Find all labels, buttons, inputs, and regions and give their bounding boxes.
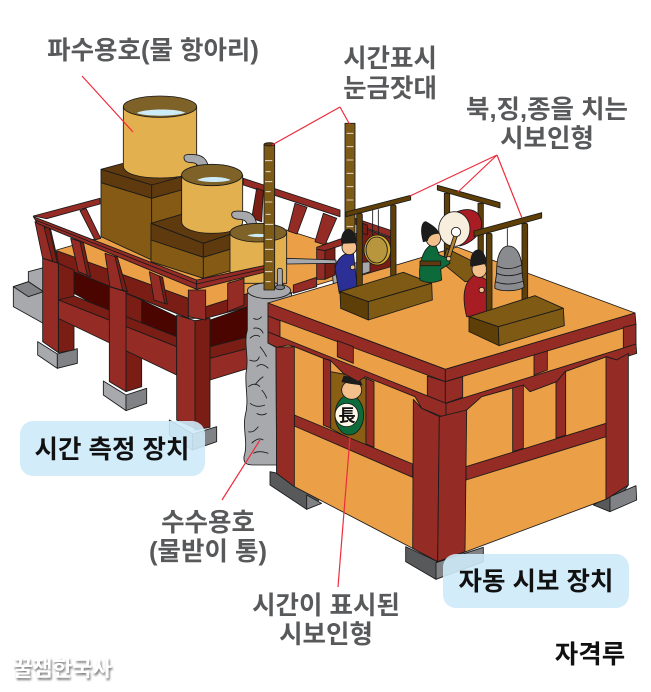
left wall <box>268 303 445 562</box>
leader lines <box>82 76 522 587</box>
box stand: medium <box>151 214 233 278</box>
caption: signal figures: 시보인형 <box>500 125 594 153</box>
building footings <box>270 472 637 579</box>
drum figure: green <box>420 222 451 282</box>
panel: time measuring device (water platform) <box>13 96 340 465</box>
drum stand back <box>437 185 500 282</box>
water jar: medium <box>182 164 243 233</box>
caption: signal figures: 북,징,종을 치는 <box>466 96 628 124</box>
pipe: large to medium jar <box>184 154 209 178</box>
lower eave beams with brackets <box>268 332 637 418</box>
rear time scale rod <box>345 123 355 240</box>
building pillars <box>276 347 628 562</box>
front rail <box>33 217 267 320</box>
box stand: large <box>101 163 182 260</box>
watermark: 꿀잼한국사 <box>13 657 112 681</box>
bell figure: red <box>464 250 487 317</box>
back rail <box>33 178 340 245</box>
wall posts <box>323 358 566 452</box>
eave beams and stubs <box>268 303 636 403</box>
pipe: medium to small jar <box>232 211 257 234</box>
gong figure: blue <box>335 229 357 293</box>
figure with sign: 長: 長 <box>338 401 356 426</box>
label box: automatic time-signal device <box>443 554 629 608</box>
label box: time measuring device <box>20 421 205 476</box>
caption: time scale rods: 시간표시 <box>343 45 437 73</box>
caption: receiving vessel: (물받이 통) <box>149 538 267 566</box>
pipe to timekeeper <box>287 258 336 264</box>
pillar footings <box>38 342 217 450</box>
drum <box>439 210 482 258</box>
panel: automatic time-signal device (building) <box>268 247 637 579</box>
mid beams <box>294 415 606 480</box>
time scale rod: front <box>264 143 275 290</box>
caption: time display figure: 시간이 표시된 <box>252 592 400 620</box>
rear rail behind gong and pipe <box>287 218 392 293</box>
water receiving column <box>244 283 292 465</box>
under-floor frame <box>43 251 248 430</box>
title: 자격루 <box>555 641 625 669</box>
caption: time scale rods: 눈금잣대 <box>343 75 437 103</box>
water jar: small <box>230 223 287 283</box>
label box: time measuring device: 시간 측정 장치 <box>35 436 189 464</box>
water jar: large <box>123 96 197 178</box>
platform floor <box>57 220 333 318</box>
caption: receiving vessel: 수수용호 <box>161 509 255 537</box>
bell stand <box>469 213 564 346</box>
figure window <box>331 372 366 447</box>
figure with sign: 長 <box>335 376 364 435</box>
caption: water jars: 파수용호(물 항아리) <box>47 37 259 65</box>
right wall <box>437 313 636 562</box>
small float rod <box>275 268 285 290</box>
caption: time display figure: 시보인형 <box>279 621 373 649</box>
gong stand <box>340 195 432 320</box>
label box: automatic time-signal device: 자동 시보 장치 <box>459 568 613 596</box>
instruments and figures on roof <box>335 185 564 346</box>
stone steps <box>13 268 43 323</box>
roof deck <box>268 247 635 369</box>
